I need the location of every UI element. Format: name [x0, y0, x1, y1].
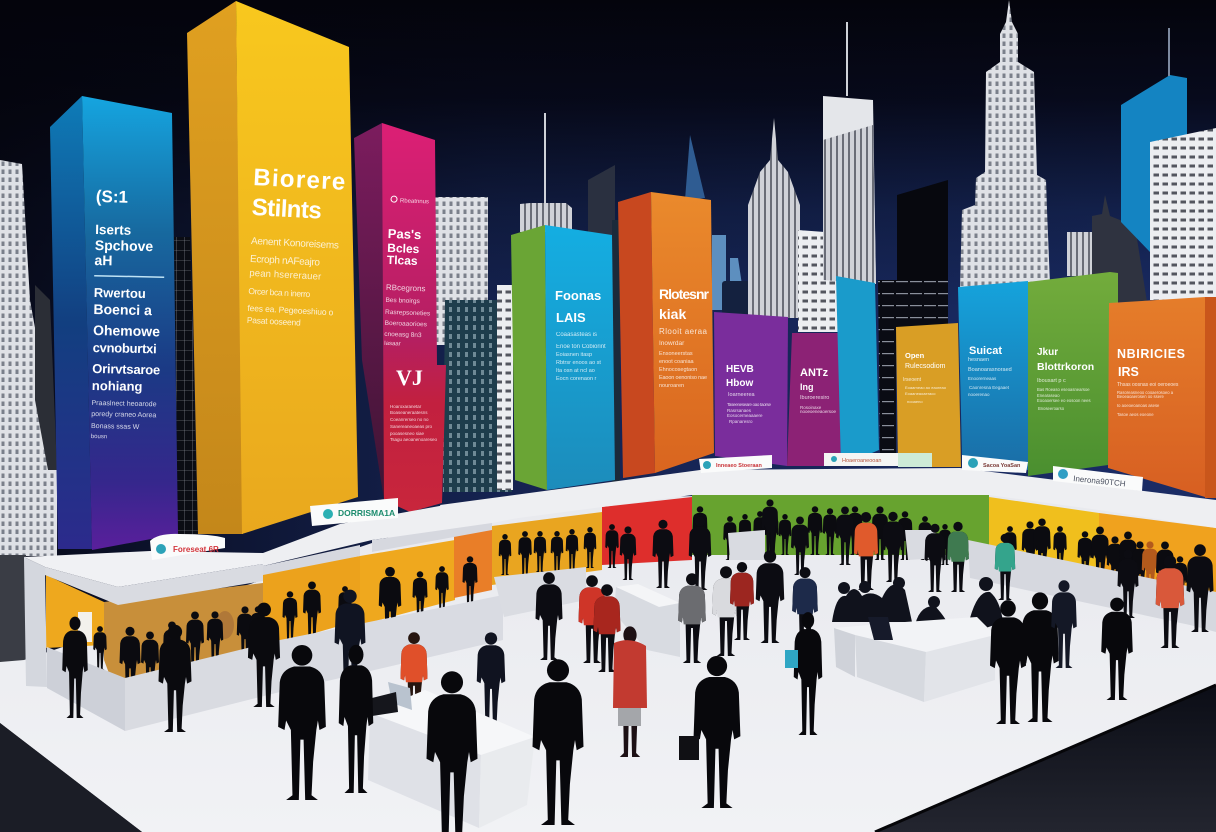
column text: Thsas oosnas eoi oeroeoes — [1117, 382, 1179, 388]
sign: centre left — [699, 455, 772, 473]
column text: Ensoneerstas — [659, 351, 693, 357]
person: man booth two — [248, 603, 280, 707]
booth wall: yellow left — [46, 575, 104, 648]
building: blue glass towers — [712, 235, 742, 310]
person: group right two — [1021, 592, 1059, 722]
building: dark angular tower — [588, 165, 615, 235]
column: narrow blue — [836, 276, 879, 466]
column text: aH — [94, 252, 113, 268]
column text: Biorere — [253, 164, 346, 196]
tower lower stripes — [823, 125, 876, 284]
column text: Rbeatnnus — [400, 198, 429, 205]
column text: Ohemowe — [93, 322, 160, 339]
exhibition booths back walls — [46, 490, 1216, 700]
small notes: Boaseaneraatesns — [390, 410, 428, 415]
person: woman red — [613, 626, 647, 757]
column text: Enoorerneaas — [968, 376, 997, 381]
column text: nouroaren — [659, 383, 684, 389]
building: dark spired block — [1092, 195, 1147, 302]
column: green and blue — [511, 225, 615, 490]
column text: Rpanaresro — [729, 419, 753, 424]
crowd: right row — [1003, 518, 1188, 605]
column text: Aenent Konoreisems — [251, 236, 339, 252]
column text: fees ea. Pegeoeshiuo o — [247, 303, 334, 317]
column text: Tlcas — [387, 253, 418, 268]
column: magenta — [354, 123, 446, 512]
antenna — [846, 22, 848, 96]
column text: Bcles — [387, 241, 420, 256]
column text: Ita osn at ncl ao — [556, 368, 595, 374]
column text: Ioarneerea — [728, 392, 756, 398]
column text: Caonresna Eegaaet — [969, 385, 1010, 390]
column text: Orirvtsaroe — [92, 361, 160, 377]
building: dark tower behind blue column — [35, 285, 57, 470]
building: blue glass tower — [1121, 75, 1187, 252]
person: orange top — [854, 512, 878, 590]
building: teal glass blocks — [443, 300, 512, 492]
counter: booth one side — [47, 647, 125, 731]
column text: ANTz — [800, 367, 829, 379]
background skyline — [0, 0, 1216, 663]
person: man reaching — [532, 659, 584, 825]
left pillar — [24, 557, 47, 687]
column text: nooerenao — [968, 392, 990, 397]
person: dark suit aisle — [536, 572, 562, 660]
sign: right two: Inerona90TCH — [1073, 474, 1126, 488]
column text: Bonass ssas W — [91, 423, 140, 431]
sign: centre left: Inneaeo Stoeraan — [716, 463, 762, 469]
booth interior: photo display — [104, 583, 263, 700]
building: strip behind orange column — [612, 220, 620, 490]
column text: Boeroaaorioes — [385, 320, 428, 328]
column text: enoot coaniaa — [659, 359, 694, 365]
crowd: centre green back — [692, 506, 951, 565]
column text: Rlotesnr — [659, 286, 710, 302]
column text: Eoaarneao ao eaoreao — [905, 385, 947, 390]
building: black tower — [897, 180, 948, 325]
counter: back left — [494, 567, 586, 617]
people behind booths front — [689, 517, 711, 590]
column text: Iasaar — [384, 341, 401, 347]
booth wall: red — [602, 497, 692, 565]
crowd: booth two — [282, 556, 478, 640]
column text: Iburoeresiro — [800, 395, 829, 401]
column text: Bas Roeaso eseoasnearsoe — [1037, 387, 1090, 392]
crowd: booth four — [499, 524, 619, 575]
person: right side group — [1186, 544, 1214, 632]
booth signs — [150, 453, 1143, 560]
column text: kiak — [659, 306, 686, 322]
column text: nooaeno — [907, 399, 923, 404]
person: group right — [990, 600, 1026, 724]
person: man far right — [1101, 598, 1133, 700]
building: black striped block — [878, 280, 948, 455]
laptop — [388, 682, 412, 710]
column text: Ehnocosegtaon — [659, 367, 697, 373]
column text: (S:1 — [96, 187, 128, 207]
column text — [1037, 347, 1094, 411]
column text — [800, 367, 836, 414]
people: front left — [62, 590, 365, 732]
building: small white block — [1067, 232, 1092, 276]
column text: Eooaoersee eo eosoon nees — [1037, 398, 1091, 403]
column text — [903, 351, 947, 404]
building: low white roof block — [520, 203, 572, 232]
person: brown hair — [924, 524, 946, 592]
column text: Io aoeoeoanoas asese — [1117, 403, 1160, 408]
column text: Rlooit aeraa — [659, 327, 708, 336]
sign: booth two — [310, 498, 398, 526]
column text: Bes bnoirgs — [385, 297, 421, 305]
back row crowd — [78, 506, 1188, 695]
building: white strip tower — [497, 285, 513, 490]
column: purple — [714, 312, 788, 466]
column text: cvnoburtxi — [93, 340, 157, 356]
column text: Rosoinaxe — [800, 405, 822, 410]
column text: Bnoseeroarso — [1038, 406, 1065, 411]
counter: middle — [280, 595, 503, 692]
column text: Stilnts — [251, 194, 322, 225]
sign: right one — [962, 455, 1028, 473]
building: art deco spire tower — [748, 118, 800, 318]
sign: right one: Sacoa YoaSan — [983, 463, 1021, 469]
column text: Open — [905, 351, 925, 360]
small notes: Coeanrerseo no no — [390, 417, 429, 422]
column text: Boanoarasnoraed — [968, 367, 1012, 373]
building: white tower right — [1150, 128, 1216, 300]
person: woman dark suit — [339, 645, 373, 793]
column text — [384, 196, 435, 348]
column text: Inowrdar — [659, 340, 685, 347]
small notes — [390, 404, 438, 442]
column text: Rwertou — [94, 285, 146, 301]
big initials: VJ — [396, 365, 423, 390]
column text: Eocn corenaon r — [556, 376, 597, 382]
column text: nohiang — [92, 378, 143, 394]
floor — [0, 490, 1216, 832]
small notes: Sanereaneoaeas pro — [390, 424, 433, 429]
column: green — [1028, 272, 1118, 476]
column text: Suicat — [969, 345, 1002, 357]
column: right orange — [1108, 297, 1216, 498]
column text: Rasrsanaes — [727, 408, 752, 413]
counter: back centre — [728, 530, 940, 560]
column text: Eoaaneaoaeraco — [905, 391, 936, 396]
sign: green panel — [898, 453, 932, 467]
person: woman right — [1051, 580, 1077, 668]
column text: bousn — [91, 434, 107, 440]
booth wall: green — [692, 490, 989, 555]
column text — [1117, 347, 1185, 417]
building: tall white tower — [823, 96, 876, 284]
people: front row — [278, 580, 1133, 832]
building: white grid block — [798, 230, 838, 332]
column text: Taseeneseare oao taorse — [727, 402, 771, 407]
desk: right centre — [834, 617, 995, 702]
people behind front desk — [400, 632, 505, 725]
column text: Ecroph nAFeajro — [250, 254, 321, 269]
antenna — [544, 113, 546, 204]
column text: NBIRICIES — [1117, 347, 1185, 361]
column: plum — [787, 333, 841, 466]
counter: right long — [968, 540, 1216, 632]
mid floor people — [536, 499, 1214, 672]
person: woman far left — [62, 617, 88, 718]
column text: LAIS — [556, 310, 586, 325]
column text: Rbtrsr enoos ao st — [556, 360, 601, 366]
column text: nooeoeneaoersoe — [800, 409, 836, 414]
small notes: Tsagu aeoanenoareseo — [390, 437, 438, 442]
column text: Coaasasteas is — [556, 332, 597, 338]
person: teal top — [995, 534, 1015, 600]
column text: hesnaen — [968, 357, 989, 363]
column text: Rasrepsoneties — [385, 309, 431, 317]
seated group behind right desk — [832, 577, 1003, 630]
column: blue — [50, 96, 178, 550]
laptop — [868, 617, 893, 640]
antenna — [1168, 28, 1170, 76]
person: woman walking — [785, 612, 822, 735]
column text: Enoe ton Cobiorint — [556, 344, 606, 350]
sign: right two — [1053, 466, 1143, 491]
booth roofs — [24, 468, 1216, 605]
person: man at desk — [426, 671, 478, 832]
column: amber — [896, 323, 961, 467]
building: navy block — [722, 281, 766, 315]
column text: Jkur — [1037, 347, 1058, 358]
column text: Iserts — [95, 222, 131, 238]
building: empire style tower — [960, 0, 1050, 288]
people: red pair — [578, 575, 606, 663]
building: blue spire — [685, 135, 705, 200]
building: gridded tower behind yellow column — [174, 237, 198, 537]
roof front edge — [263, 523, 492, 575]
column text: Rasoreasneoo cooaerosoeo a — [1117, 390, 1174, 395]
floor edge line — [875, 685, 1216, 832]
booth wall: orange — [454, 527, 492, 598]
column text: Blottrkoron — [1037, 361, 1094, 373]
column text: Pasat ooseend — [247, 315, 301, 328]
booth wall: yellow 3 — [360, 540, 455, 625]
column text: Foonas — [555, 288, 601, 303]
booth wall: amber 4 — [492, 512, 602, 585]
column text: IRS — [1118, 365, 1139, 379]
column text — [968, 345, 1012, 397]
person: man navy — [335, 590, 365, 690]
column text: Enearaseao — [1037, 393, 1060, 398]
column: mid blue — [958, 281, 1028, 470]
desk: middle — [614, 584, 680, 657]
dark floor left corner — [0, 723, 142, 832]
column text: RBcegrons — [386, 283, 426, 293]
laptop dark — [372, 692, 398, 716]
roof front edge — [45, 564, 263, 605]
person: green coat — [947, 522, 969, 592]
column text — [246, 164, 346, 330]
building: left dark base — [0, 555, 26, 663]
column text: Eosocerneaaaere — [727, 413, 763, 418]
column text — [726, 364, 771, 424]
column text: Tasoe aeos eoeone — [1117, 412, 1154, 417]
column text: poredy craneo Aorea — [91, 411, 156, 419]
column text: Eoiasnen itasp — [556, 352, 592, 358]
people: centre aisle — [678, 573, 706, 663]
desk: front centre — [368, 682, 535, 828]
small notes: pooasesneo siae — [390, 431, 425, 436]
building: white office tower — [435, 197, 488, 345]
booth wall: yellow 2 — [263, 556, 360, 648]
sign: booth one: Foreseat 6R — [173, 545, 219, 554]
column text: Irseoent — [903, 377, 922, 383]
counter: left long front — [125, 640, 280, 731]
column text — [659, 286, 710, 389]
column text — [91, 187, 166, 441]
person: orange jacket — [400, 632, 428, 720]
booth wall: orange yellow right — [1099, 513, 1216, 600]
person: man briefcase — [679, 656, 740, 808]
booth counters — [24, 530, 1216, 731]
sign: booth one — [150, 534, 225, 560]
column text: HEVB — [726, 364, 754, 375]
column text: Ibousart p c — [1037, 378, 1066, 384]
column text: Pas's — [388, 226, 422, 242]
column text: Rulecsodiom — [905, 363, 946, 370]
crowd: booth one — [78, 606, 266, 695]
column text — [555, 288, 606, 382]
small notes: Hoaroxaranetar — [390, 404, 422, 409]
column text: cnoeasg 8n3 — [384, 331, 422, 339]
column: orange — [618, 192, 714, 478]
building: left white tower — [0, 160, 57, 556]
column text: Spchove — [95, 237, 154, 254]
sign: centre: Hoaeroaneooan — [842, 458, 881, 464]
dark reflective floor right corner — [875, 685, 1216, 832]
column: yellow — [187, 1, 358, 534]
column text: Orcer bca n inerro — [248, 286, 311, 299]
roof: booth two and three — [263, 487, 612, 566]
sign: centre — [824, 453, 898, 466]
roof: centre arc — [440, 468, 1216, 528]
column text: Beoeaoaerosen oo ssere — [1117, 394, 1164, 399]
column text: Praaslnect heoarode — [91, 400, 157, 408]
person: man left — [278, 645, 326, 800]
roof: booth one — [24, 551, 263, 587]
column text: Ing — [800, 382, 814, 392]
booth wall: yellow right — [989, 497, 1099, 570]
column text: Boenci a — [93, 301, 152, 318]
sign: booth two: DORRISMA1A — [338, 508, 395, 518]
person: dark suit behind desk — [477, 632, 505, 725]
person: man booth one — [158, 625, 192, 732]
column text: Hbow — [726, 378, 753, 389]
column text: Eaoon oenoniso nae — [659, 375, 707, 381]
column text: pean hsererauer — [249, 268, 322, 283]
